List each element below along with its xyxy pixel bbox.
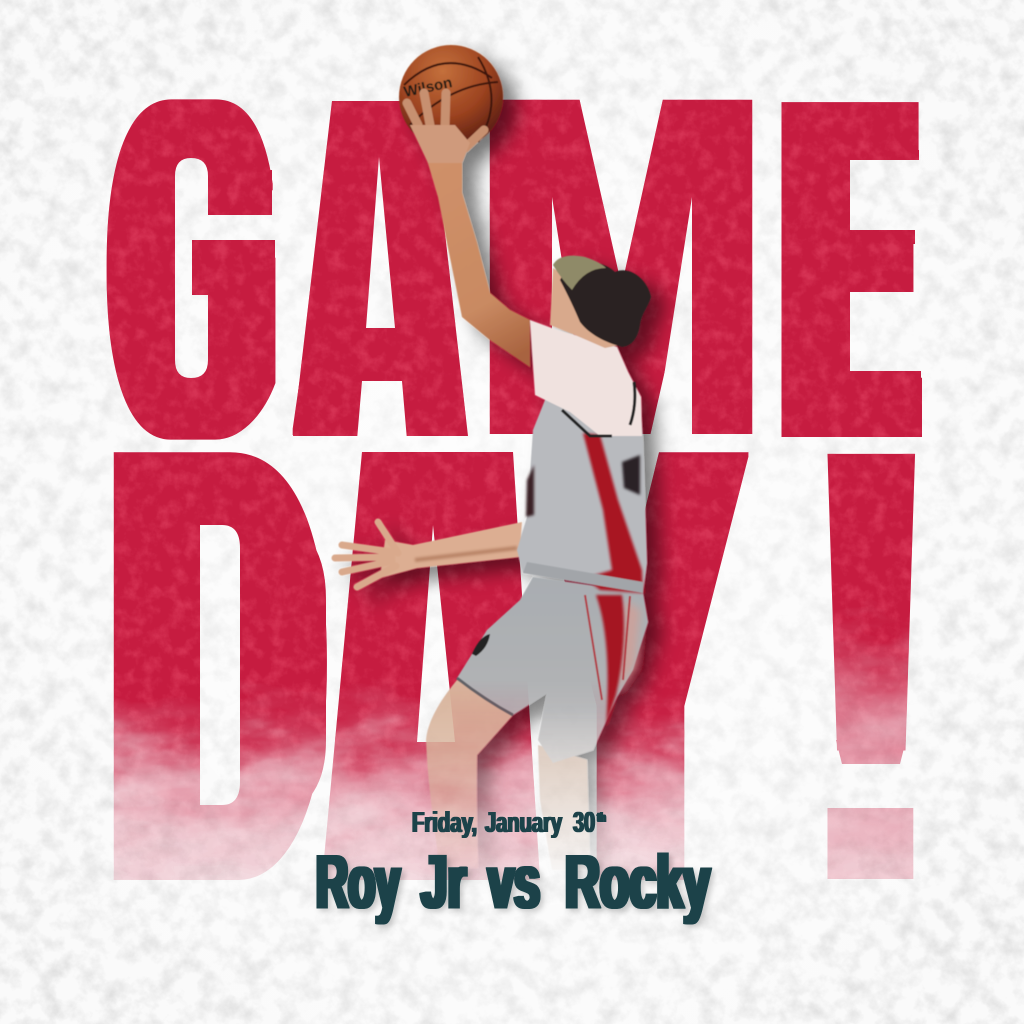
headline: GAME: M xyxy=(479,0,763,536)
jersey xyxy=(517,400,647,593)
matchup title: Jr xyxy=(421,840,466,925)
headline: GAME: E xyxy=(792,3,907,536)
shorts xyxy=(457,577,648,763)
matchup title xyxy=(316,840,710,925)
ball brand: Wilson xyxy=(402,74,454,101)
white undershirt sleeve xyxy=(530,320,642,436)
headline: GAME xyxy=(106,99,922,440)
date line: 30 xyxy=(573,807,595,839)
back leg xyxy=(538,745,590,870)
headline: DAY xyxy=(114,452,748,880)
matchup title: Rocky xyxy=(565,840,710,925)
front leg xyxy=(426,680,513,868)
left arm and spread hand xyxy=(335,522,522,587)
head xyxy=(550,256,651,348)
player with drop shadow xyxy=(335,45,651,870)
raised arm xyxy=(427,160,530,367)
headline: exclamation mark: ! xyxy=(770,320,973,1011)
headline: GAME: G xyxy=(121,4,265,532)
headline: GAME: A xyxy=(310,6,445,533)
basketball xyxy=(399,45,503,149)
ordinal suffix: th xyxy=(597,809,606,825)
headline: DAY: D xyxy=(121,320,313,1009)
headline: DAY: Y xyxy=(553,322,728,1009)
matchup title: vs xyxy=(488,840,540,925)
headline: DAY: A xyxy=(350,320,516,1009)
date line xyxy=(412,807,606,839)
matchup title: Roy xyxy=(316,840,400,925)
headline: exclamation mark xyxy=(828,454,916,879)
hand on ball xyxy=(407,93,484,163)
date line: Friday, xyxy=(412,807,477,839)
date line: January xyxy=(485,807,562,839)
